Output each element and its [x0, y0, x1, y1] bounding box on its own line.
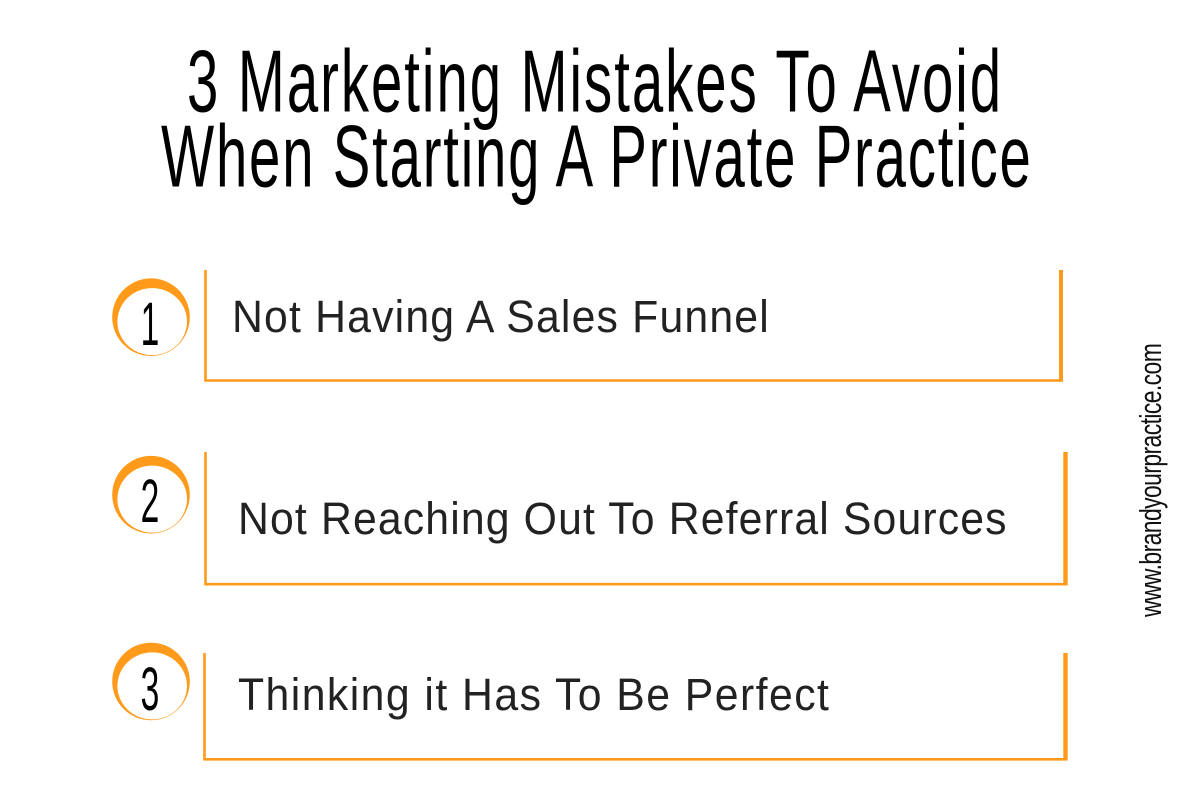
panel 3 bracket	[204, 653, 1066, 759]
icon: number badge 2: 2	[141, 467, 159, 536]
title: When Starting A Private Practice	[161, 107, 1031, 206]
mistake 1 text: Not Having A Sales Funnel	[232, 292, 769, 342]
mistake 2 text: Not Reaching Out To Referral Sources	[238, 494, 1007, 544]
title: 3 Marketing Mistakes To Avoid	[187, 32, 1001, 131]
panel: mistake 1	[112, 270, 1063, 382]
icon: number badge 1	[112, 278, 190, 359]
icon: number badge 3	[112, 643, 190, 724]
icon: number badge 3: 3	[141, 655, 159, 724]
panel 2 bracket	[206, 452, 1066, 584]
panel 1 bracket	[206, 270, 1061, 380]
panel: mistake 3	[112, 643, 1068, 760]
panel: mistake 2	[112, 452, 1068, 585]
mistake 3 text: Thinking it Has To Be Perfect	[238, 670, 829, 720]
website url: www.brandyourpractice.com	[1133, 343, 1168, 618]
icon: number badge 2	[112, 456, 190, 536]
icon: number badge 1: 1	[141, 290, 159, 359]
title	[161, 32, 1031, 206]
